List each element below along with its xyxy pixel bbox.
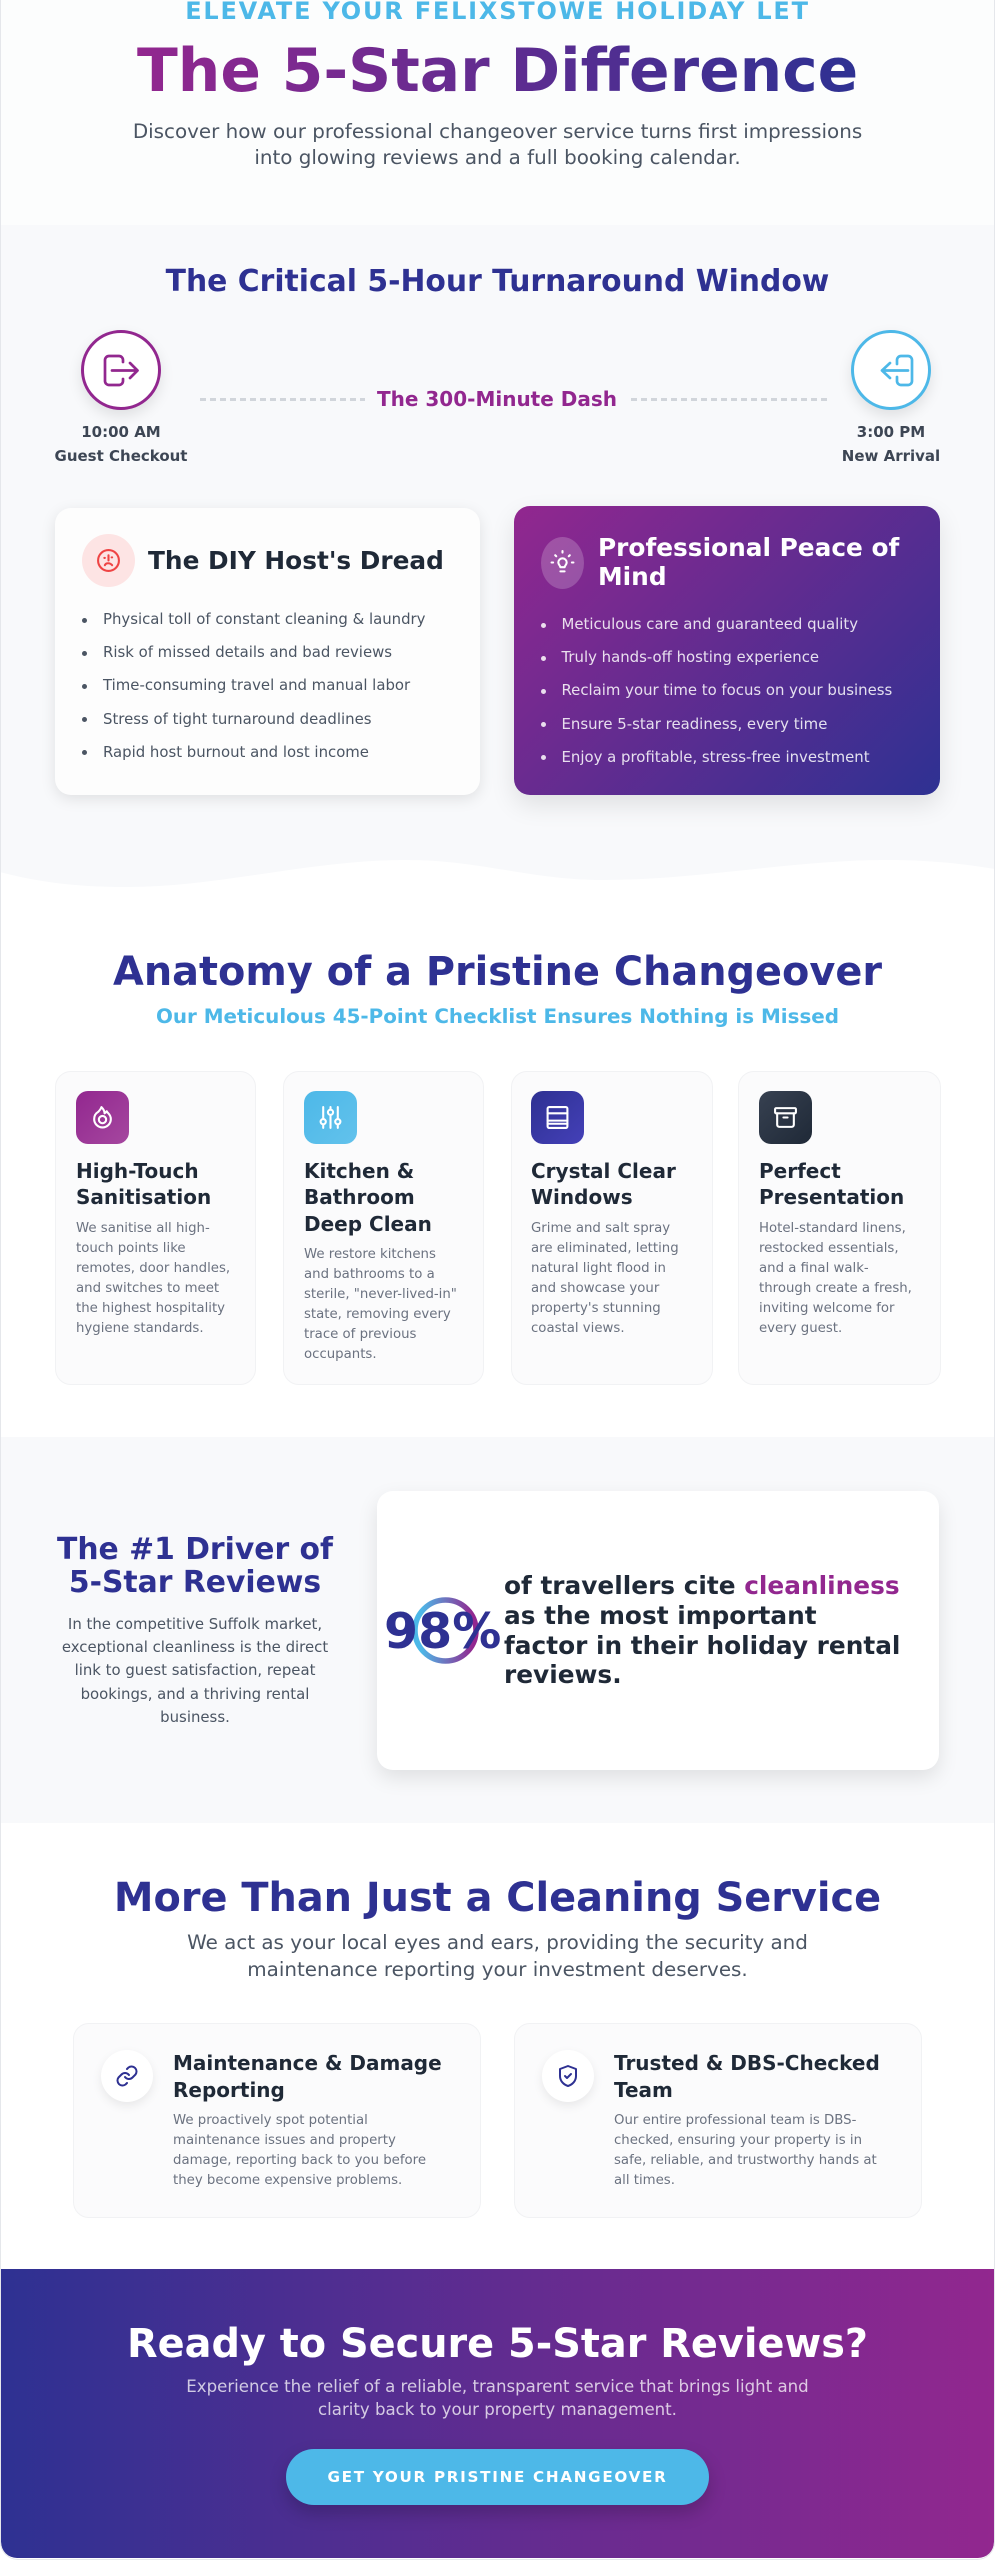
title: Windows [531, 1185, 633, 1209]
description: maintenance issues and property [173, 2132, 396, 2148]
description [62, 1615, 328, 1726]
title: Bathroom [304, 1185, 415, 1209]
description: are eliminated, letting [531, 1240, 679, 1256]
subtitle: into glowing reviews and a full booking calendar. [254, 146, 741, 169]
description: state, removing every [304, 1306, 451, 1322]
description: bookings, and a thriving rental [81, 1685, 309, 1703]
description: restocked essentials, [759, 1240, 899, 1256]
arrival label [842, 423, 940, 464]
icon: shield check [542, 2050, 594, 2102]
description: Experience the relief of a reliable, transparent service that brings light and [186, 2377, 809, 2396]
dash label: The 300-Minute Dash [377, 387, 617, 411]
list: Ensure 5-star readiness, every time [562, 715, 827, 733]
description [531, 1220, 679, 1336]
statement [504, 1571, 900, 1689]
list [541, 615, 892, 766]
icon: archive [759, 1091, 812, 1144]
heading [598, 533, 900, 591]
description: touch points like [76, 1240, 186, 1256]
description: they become expensive problems. [173, 2172, 402, 2188]
statement: of travellers cite cleanliness [504, 1571, 900, 1600]
header section [0, 0, 995, 225]
list: Reclaim your time to focus on your business [562, 681, 892, 699]
list: Time-consuming travel and manual labor [103, 676, 410, 694]
checkout label: Guest Checkout [55, 446, 187, 464]
statement: factor in their holiday rental [504, 1631, 900, 1660]
description [173, 2112, 426, 2188]
description: sterile, "never-lived-in" [304, 1286, 457, 1302]
icon: new arrival [851, 330, 931, 410]
description: trace of previous [304, 1326, 416, 1342]
description: business. [160, 1708, 230, 1726]
panel: professional [514, 506, 940, 795]
description: Grime and salt spray [531, 1220, 670, 1236]
panel: DIY host [55, 508, 480, 795]
description: hygiene standards. [76, 1320, 204, 1336]
title: High-Touch [76, 1158, 199, 1182]
heading [57, 1532, 334, 1600]
icon: bulb [541, 537, 584, 589]
title [531, 1158, 676, 1209]
title: Perfect [759, 1158, 841, 1182]
title: Maintenance & Damage [173, 2051, 442, 2075]
turnaround section [0, 225, 995, 890]
description: all times. [614, 2172, 675, 2188]
panel: statistic card [377, 1491, 939, 1770]
description: coastal views. [531, 1320, 625, 1336]
checkout label: 10:00 AM [81, 423, 161, 441]
description [614, 2112, 877, 2188]
heading: Ready to Secure 5-Star Reviews? [127, 2321, 868, 2367]
description [76, 1220, 230, 1336]
title: Crystal Clear [531, 1158, 676, 1182]
heading: Mind [598, 562, 667, 591]
section subheading: Our Meticulous 45-Point Checklist Ensures Nothing is Missed [156, 1005, 839, 1028]
call to action [1, 2269, 994, 2558]
subtitle: Discover how our professional changeover service turns first impressions [133, 120, 862, 142]
button [286, 2449, 709, 2505]
description: property's stunning [531, 1300, 661, 1316]
title: Kitchen & [304, 1158, 414, 1182]
title: Deep Clean [304, 1212, 432, 1236]
anatomy section [0, 890, 995, 1437]
icon: guest checkout [81, 330, 161, 410]
description: every guest. [759, 1320, 842, 1336]
section subtitle [187, 1931, 808, 1981]
description: inviting welcome for [759, 1300, 895, 1316]
description: safe, reliable, and trustworthy hands at [614, 2152, 877, 2168]
title: Reporting [173, 2078, 285, 2102]
description: We sanitise all high- [76, 1220, 210, 1236]
description: We proactively spot potential [173, 2112, 368, 2128]
heading: 5-Star Reviews [69, 1565, 321, 1600]
services section [0, 1823, 995, 2269]
icon: tired face [82, 534, 135, 587]
heading: Professional Peace of [598, 533, 899, 562]
ring chart [413, 1597, 479, 1664]
description [186, 2377, 809, 2419]
section heading: The Critical 5-Hour Turnaround Window [166, 264, 829, 298]
icon: link [101, 2050, 153, 2102]
description: the highest hospitality [76, 1300, 225, 1316]
description: occupants. [304, 1346, 377, 1362]
list: Physical toll of constant cleaning & laundry [103, 610, 426, 628]
heading: The DIY Host's Dread [148, 546, 444, 574]
description [759, 1220, 912, 1336]
subtitle [133, 120, 862, 169]
dashed line right [631, 398, 829, 401]
description: Hotel-standard linens, [759, 1220, 906, 1236]
button: GET YOUR PRISTINE CHANGEOVER [327, 2468, 668, 2486]
title: Presentation [759, 1185, 904, 1209]
description: Our entire professional team is DBS- [614, 2112, 856, 2128]
description: and switches to meet [76, 1280, 219, 1296]
wave divider [0, 855, 995, 890]
statement: reviews. [504, 1660, 622, 1689]
description: through create a fresh, [759, 1280, 912, 1296]
title: Sanitisation [76, 1185, 211, 1209]
description: natural light flood in [531, 1260, 666, 1276]
icon: flame [76, 1091, 129, 1144]
list [82, 610, 426, 761]
card: maintenance [73, 2023, 481, 2218]
icon: window [531, 1091, 584, 1144]
description: link to guest satisfaction, repeat [75, 1661, 315, 1679]
title [614, 2051, 880, 2102]
dashed line left [200, 398, 365, 401]
description: We restore kitchens [304, 1246, 436, 1262]
title: Team [614, 2078, 673, 2102]
checkout label [55, 423, 188, 464]
title [759, 1158, 904, 1209]
card: kitchen [283, 1071, 484, 1385]
arrival label: New Arrival [842, 446, 940, 464]
description: and bathrooms to a [304, 1266, 435, 1282]
card: sanitisation [55, 1071, 256, 1385]
statistic section [0, 1437, 995, 1823]
list: Stress of tight turnaround deadlines [103, 710, 372, 728]
title [304, 1158, 432, 1236]
icon: sliders [304, 1091, 357, 1144]
title [173, 2051, 442, 2102]
list: Rapid host burnout and lost income [103, 743, 369, 761]
title: The 5-Star Difference [137, 36, 858, 106]
list: Risk of missed details and bad reviews [103, 643, 392, 661]
description [304, 1246, 457, 1362]
card: team [514, 2023, 922, 2218]
statistic value: 98% [384, 1602, 501, 1660]
heading: The #1 Driver of [57, 1532, 333, 1566]
description: In the competitive Suffolk market, [68, 1615, 322, 1633]
list: Enjoy a profitable, stress-free investment [562, 748, 870, 766]
title [76, 1158, 211, 1209]
description: and a final walk- [759, 1260, 869, 1276]
list: Truly hands-off hosting experience [562, 648, 819, 666]
description: remotes, door handles, [76, 1260, 230, 1276]
statement: as the most important [504, 1601, 817, 1630]
section heading: Anatomy of a Pristine Changeover [113, 949, 882, 995]
description: exceptional cleanliness is the direct [62, 1638, 328, 1656]
list: Meticulous care and guaranteed quality [562, 615, 858, 633]
section subtitle: maintenance reporting your investment deserves. [247, 1958, 748, 1981]
description: clarity back to your property management. [318, 2400, 677, 2419]
description: damage, reporting back to you before [173, 2152, 426, 2168]
timeline [55, 330, 940, 464]
arrival label: 3:00 PM [857, 423, 925, 441]
title: Trusted & DBS-Checked [614, 2051, 880, 2075]
card: windows [511, 1071, 713, 1385]
section subtitle: We act as your local eyes and ears, providing the security and [187, 1931, 808, 1954]
description: checked, ensuring your property is in [614, 2132, 862, 2148]
section heading: More Than Just a Cleaning Service [114, 1875, 881, 1921]
card: presentation [738, 1071, 941, 1385]
description: and showcase your [531, 1280, 659, 1296]
